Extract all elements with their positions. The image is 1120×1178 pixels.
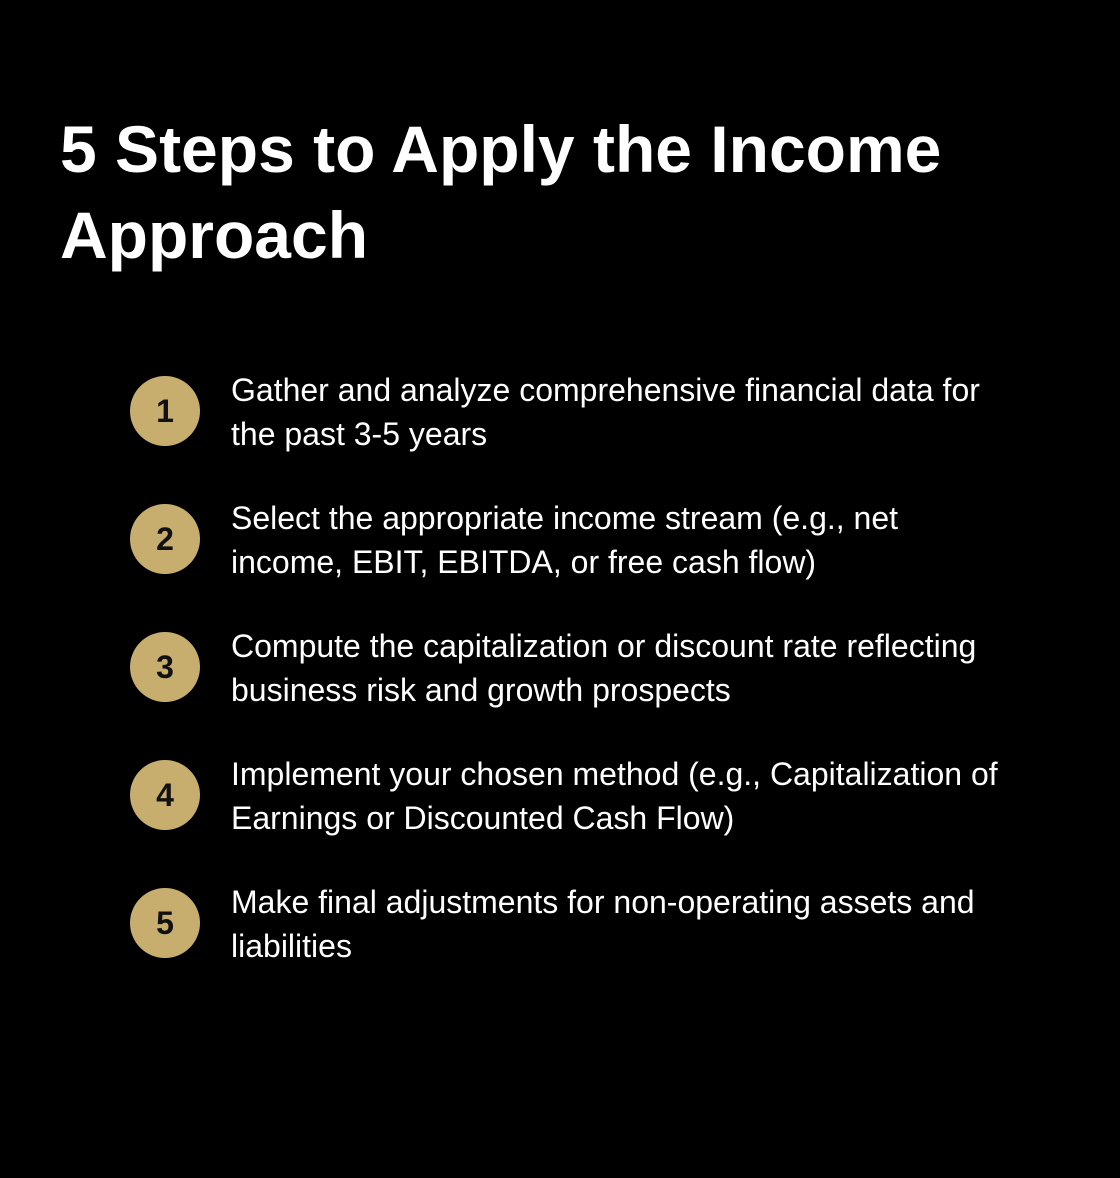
text 1: Gather and analyze comprehensive financial data for xyxy=(231,372,980,408)
text 3: Compute the capitalization or discount rate reflecting xyxy=(231,628,976,664)
text 4: Earnings or Discounted Cash Flow) xyxy=(231,800,734,836)
title: 5 Steps to Apply the Income Approach xyxy=(60,112,941,272)
text 3 xyxy=(231,628,976,708)
text 5: Make final adjustments for non-operating assets and xyxy=(231,884,975,920)
step 2 xyxy=(130,500,898,580)
number 1: 1 xyxy=(156,393,174,429)
text 5 xyxy=(231,884,975,964)
number 4: 4 xyxy=(156,777,174,813)
step 4 xyxy=(130,756,998,836)
text 5: liabilities xyxy=(231,928,352,964)
text 4: Implement your chosen method (e.g., Capitalization of xyxy=(231,756,998,792)
text 2 xyxy=(231,500,898,580)
step 5 xyxy=(130,884,975,964)
text 3: business risk and growth prospects xyxy=(231,672,731,708)
number 3 xyxy=(130,632,200,702)
text 2: Select the appropriate income stream (e.g., net xyxy=(231,500,898,536)
number 5 xyxy=(130,888,200,958)
step 1 xyxy=(130,372,980,452)
number 4 xyxy=(130,760,200,830)
number 5: 5 xyxy=(156,905,174,941)
text 1 xyxy=(231,372,980,452)
text 4 xyxy=(231,756,998,836)
number 3: 3 xyxy=(156,649,174,685)
number 2 xyxy=(130,504,200,574)
text 1: the past 3-5 years xyxy=(231,416,487,452)
number 1 xyxy=(130,376,200,446)
text 2: income, EBIT, EBITDA, or free cash flow) xyxy=(231,544,816,580)
step 3 xyxy=(130,628,976,708)
number 2: 2 xyxy=(156,521,174,557)
